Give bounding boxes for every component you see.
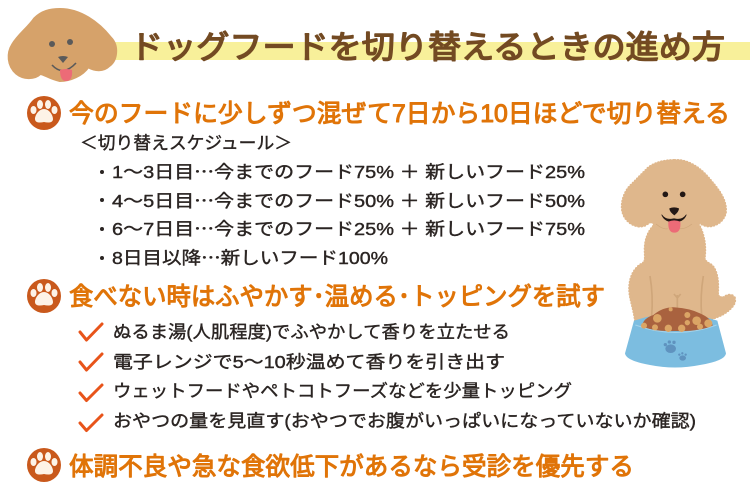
check item 3: ウェットフードやペトコトフーズなどを少量トッピング <box>113 381 572 401</box>
schedule line 3: 6〜7日目 …今までのフード25% ＋ 新しいフード75% <box>112 216 585 241</box>
kibble <box>642 307 713 331</box>
schedule line 4: 8日目以降 …新しいフード100% <box>112 245 388 270</box>
check item 1: ぬるま湯(人肌程度)でふやかして香りを立たせる <box>113 322 510 342</box>
schedule line 1: 1〜3日目 …今までのフード75% ＋ 新しいフード25% <box>112 159 585 184</box>
schedule heading: ＜切り替えスケジュール＞ <box>80 133 292 153</box>
heading 2: 食べない時はふやかす･温める･トッピングを試す <box>69 283 605 311</box>
bowl paws <box>664 340 687 361</box>
bowl <box>625 314 726 367</box>
illustration: dog with food bowl <box>622 161 734 367</box>
icon: paw 2 <box>27 279 61 313</box>
title highlight band <box>112 42 750 60</box>
check item 2: 電子レンジで5〜10秒温めて香りを引き出す <box>113 352 505 372</box>
heading 1: 今のフードに少しずつ混ぜて7日から10日ほどで切り替える <box>69 100 730 128</box>
icon: paw 3 <box>27 448 61 482</box>
schedule block <box>80 133 585 270</box>
icon: paw 1 <box>27 96 61 130</box>
icon: small dog head <box>10 10 115 81</box>
schedule line 2: 4〜5日目 …今までのフード50% ＋ 新しいフード50% <box>112 188 585 213</box>
heading 3: 体調不良や急な食欲低下があるなら受診を優先する <box>69 453 634 481</box>
title: ドッグフードを切り替えるときの進め方 <box>130 29 725 65</box>
check item 4: おやつの量を見直す(おやつでお腹がいっぱいになっていないか確認) <box>113 411 696 431</box>
